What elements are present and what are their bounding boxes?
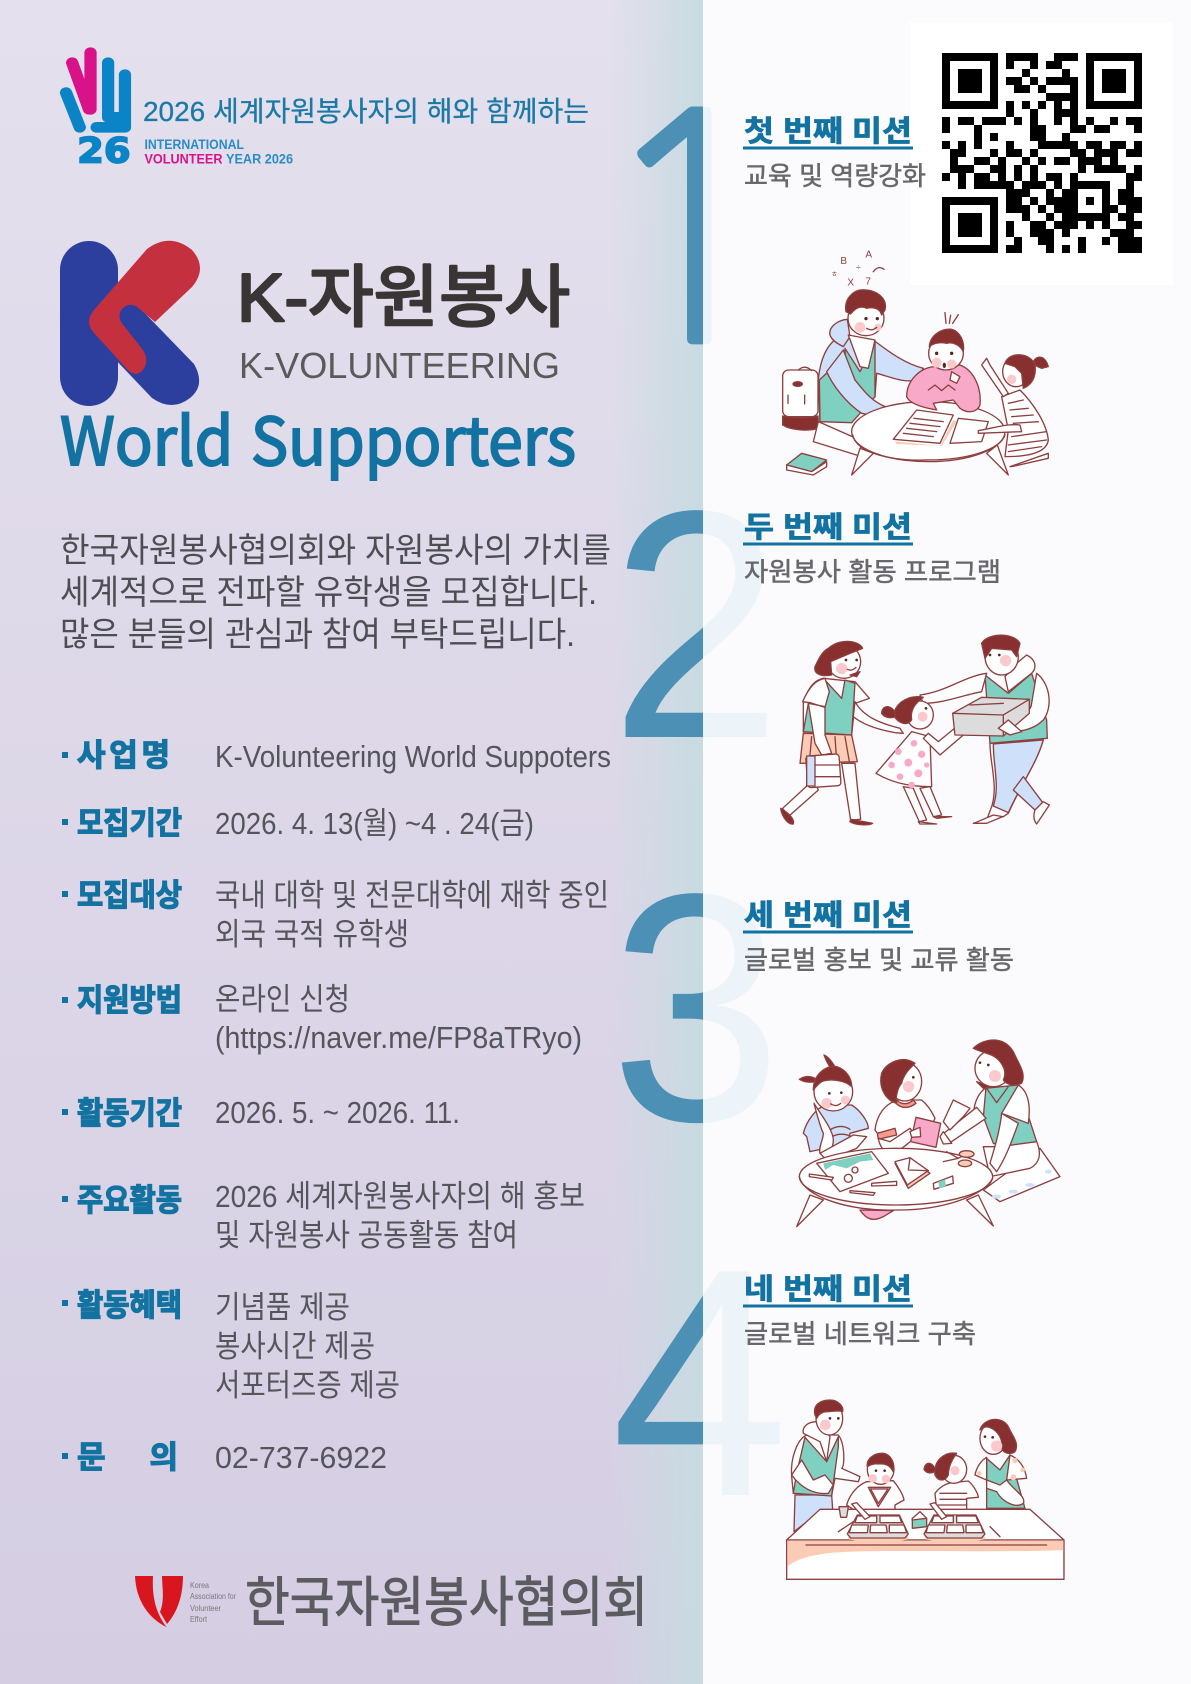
info row: 주요활동: 2026 세계자원봉사자의 해 홍보: [215, 1179, 585, 1214]
K-자원봉사 wordmark: K-자원봉사: [237, 260, 570, 336]
background: right white panel: [703, 0, 1191, 1684]
mission 1 heading: 첫 번째 미션: [744, 115, 912, 148]
info row: 사업명: 사 업 명: [77, 738, 170, 773]
K-Volunteering K logo: [60, 241, 200, 406]
illustration: study table with teacher and children: A: [865, 249, 872, 260]
footer logo: Korea Association for Volunteer Effort: Association for: [190, 1591, 236, 1601]
illustration: study table with teacher and children: B: [840, 256, 847, 267]
info row: 활동기간: [62, 1095, 460, 1131]
numeral 4: 4: [611, 1201, 789, 1564]
footer logo: Korea Association for Volunteer Effort: Volunteer: [190, 1603, 221, 1613]
IVY wordmark: YEAR 2026: [226, 152, 293, 166]
intro text block: 한국자원봉사협의회와 자원봉사의 가치를: [60, 532, 611, 570]
info row: 모집대상: 외국 국적 유학생: [215, 917, 409, 952]
info row: 모집대상: 모집대상: [77, 878, 182, 913]
info row: 모집기간: 모집기간: [77, 806, 182, 841]
info row: 주요활동: [62, 1179, 585, 1253]
info row: 사업명: K-Volunteering World Suppoters: [215, 739, 611, 774]
info row: 활동혜택: 봉사시간 제공: [215, 1329, 375, 1364]
intro text block: 많은 분들의 관심과 참여 부탁드립니다.: [60, 616, 575, 654]
K-VOLUNTEERING wordmark: K-VOLUNTEERING: [239, 345, 560, 386]
footer logo: Korea Association for Volunteer Effort: [135, 1576, 236, 1627]
mission 1 subtitle: 교육 및 역량강화: [744, 161, 926, 191]
info row: 지원방법: [62, 982, 582, 1055]
background: left lavender panel: [0, 0, 704, 1684]
info row: 활동기간: 활동기간: [77, 1096, 182, 1131]
info row: 활동혜택: 기념품 제공: [215, 1290, 350, 1325]
info row: 모집기간: 2026. 4. 13(월) ~4 . 24(금): [215, 806, 534, 841]
footer logo: Korea Association for Volunteer Effort: Korea: [190, 1580, 209, 1590]
footer logo: Korea Association for Volunteer Effort: Effort: [190, 1614, 208, 1624]
intro text block: [60, 532, 611, 654]
info row: 문의: 문 의: [77, 1440, 178, 1475]
IVY wordmark: VOLUNTEER: [144, 152, 223, 166]
info row: 문의: [62, 1440, 387, 1475]
info row: 문의: 02-737-6922: [215, 1440, 387, 1475]
footer organization name: 한국자원봉사협의회: [245, 1573, 648, 1633]
info row: 사업명: [62, 738, 611, 774]
mission 4 heading: 네 번째 미션: [744, 1273, 912, 1306]
mission 2 subtitle: 자원봉사 활동 프로그램: [744, 557, 1001, 587]
numeral 2: 2: [610, 443, 782, 806]
illustration: craft table with children and adult: [797, 1040, 1060, 1227]
info row: 지원방법: 지원방법: [77, 983, 182, 1018]
illustration: family passing a donation box: [781, 635, 1049, 825]
info row: 주요활동: 및 자원봉사 공동활동 참여: [215, 1218, 518, 1253]
QR code panel: [910, 22, 1173, 285]
illustration: study table with teacher and children: ㅎ: [831, 270, 838, 279]
info row: 주요활동: 주요활동: [77, 1183, 182, 1218]
info row: 지원방법: (https://naver.me/FP8aTRyo): [215, 1020, 582, 1055]
IVY 2026 hand logo: [66, 53, 131, 171]
info row: 모집대상: 국내 대학 및 전문대학에 재학 중인: [215, 878, 609, 913]
info row: 모집기간: [62, 806, 534, 841]
illustration: family serving meals at table: [787, 1400, 1064, 1579]
IVY 2026 hand logo: 26: [77, 130, 131, 171]
info row: 지원방법: 온라인 신청: [215, 982, 350, 1017]
IVY wordmark: INTERNATIONAL: [144, 137, 244, 152]
title: World Supporters: World Supporters: [60, 389, 576, 485]
mission 3 heading: 세 번째 미션: [744, 899, 912, 932]
illustration: study table with teacher and children: 7: [865, 277, 871, 288]
IVY wordmark: [144, 137, 293, 166]
info row: 활동혜택: [62, 1288, 400, 1403]
info row: 활동혜택: 서포터즈증 제공: [215, 1368, 400, 1403]
numeral 3: 3: [610, 826, 782, 1189]
info row: 활동기간: 2026. 5. ~ 2026. 11.: [215, 1095, 460, 1130]
info row: 모집대상: [62, 878, 609, 952]
mission 2 heading: 두 번째 미션: [744, 511, 912, 544]
intro text block: 세계적으로 전파할 유학생을 모집합니다.: [60, 574, 597, 612]
header line: 2026 세계자원봉사자의 해와 함께하는: [143, 96, 589, 127]
illustration: study table with teacher and children: X: [847, 277, 854, 288]
info row: 활동혜택: 활동혜택: [77, 1288, 182, 1323]
illustration: study table with teacher and children: [783, 249, 1048, 475]
mission 3 subtitle: 글로벌 홍보 및 교류 활동: [744, 945, 1014, 975]
numeral 1: 1: [594, 73, 785, 388]
illustration: study table with teacher and children: ÷: [856, 262, 861, 272]
mission 4 subtitle: 글로벌 네트워크 구축: [744, 1319, 976, 1349]
